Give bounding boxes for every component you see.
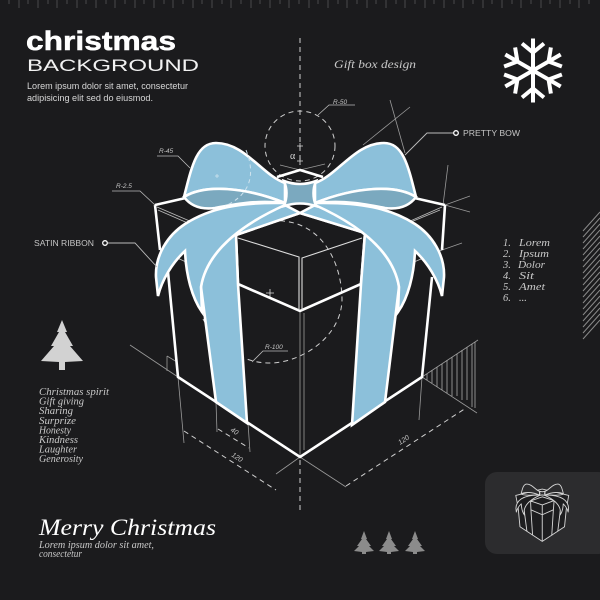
values list: Kindness	[38, 435, 78, 446]
dimension 40	[218, 427, 249, 448]
extra thin guide lines	[130, 165, 470, 487]
intro text: adipisicing elit sed do eiusmod.	[27, 93, 153, 104]
callout: satin ribbon: SATIN RIBBON	[34, 239, 94, 248]
bow loop left	[184, 143, 285, 203]
numbered list: 5.	[503, 282, 511, 293]
bow construction overlay	[225, 150, 251, 206]
numbered list: 3.	[502, 260, 511, 271]
bow loop right inside	[315, 189, 416, 208]
numbered list: Dolor	[517, 260, 546, 271]
label: alpha: α	[290, 151, 296, 162]
values list: Surprize	[39, 416, 77, 427]
values list: Christmas spirit	[39, 387, 109, 398]
numbered list: Lorem	[518, 238, 550, 249]
values list: Honesty	[38, 426, 72, 436]
inner lid lines	[157, 207, 442, 262]
ribbon front left band	[201, 204, 300, 423]
numbered list: Sit	[519, 271, 535, 282]
diagonal hatch at right edge	[583, 212, 600, 339]
values list: Sharing	[39, 406, 73, 417]
label: R-45	[157, 148, 190, 168]
label: R-50	[318, 99, 355, 115]
numbered list: 2.	[503, 249, 511, 260]
heading: background: BACKGROUND	[27, 57, 199, 75]
merry christmas greeting: Merry Christmas	[38, 515, 216, 540]
icon: snowflake	[500, 38, 566, 102]
ruler ticks along the top edge	[9, 0, 589, 8]
bow loop left inside	[184, 189, 285, 208]
hatched triangle	[422, 340, 478, 413]
label: R-50: R-50	[333, 99, 347, 106]
label: R-100	[252, 344, 288, 362]
numbered list: Amet	[518, 282, 546, 293]
dimension 40: 40	[229, 427, 239, 437]
intro text	[27, 81, 189, 104]
numbered list	[502, 238, 550, 304]
numbered list: Ipsum	[518, 249, 549, 260]
dimension 120 left	[184, 431, 276, 490]
values list	[38, 387, 109, 465]
label: R-2.5: R-2.5	[116, 183, 132, 190]
callout: pretty bow: PRETTY BOW	[463, 129, 520, 138]
numbered list: 6.	[503, 293, 511, 304]
intro text: Lorem ipsum dolor sit amet, consectetur	[27, 81, 189, 92]
numbered list: 1.	[503, 238, 511, 249]
icons: three small trees	[354, 531, 425, 554]
thumbnail panel	[485, 472, 600, 554]
ribbon front right band	[300, 204, 399, 425]
greeting subtext: Lorem ipsum dolor sit amet,	[38, 540, 154, 551]
lid top	[155, 170, 445, 250]
gift box illustration	[155, 143, 445, 457]
values list: Generosity	[39, 454, 84, 465]
greeting subtext: consectetur	[39, 549, 82, 560]
construction lines and dimensions	[112, 38, 478, 510]
construction circle R-100	[203, 221, 342, 363]
numbered list: ...	[519, 293, 527, 304]
values list: Gift giving	[39, 396, 84, 408]
ribbon tail right	[315, 203, 444, 312]
label: R-100: R-100	[265, 344, 283, 351]
bow loop right	[315, 143, 416, 203]
construction circle R-50	[265, 111, 335, 181]
values list: Laughter	[38, 444, 77, 456]
ribbon tail left	[156, 203, 285, 312]
heading: christmas: christmas	[26, 26, 176, 56]
callout: pretty bow	[405, 129, 520, 155]
dimension 120 right	[346, 408, 466, 486]
icon: small gift box outline	[516, 484, 569, 541]
title block	[26, 26, 199, 104]
label: R-45: R-45	[159, 148, 173, 155]
label: R-2.5	[112, 183, 155, 205]
caption: gift box design: Gift box design	[334, 57, 416, 71]
bow knot	[284, 181, 316, 206]
box body sides	[168, 272, 432, 457]
numbered list: 4.	[503, 271, 511, 282]
dimension 120 left: 120	[230, 452, 244, 464]
front lid	[236, 213, 365, 311]
icon: large tree	[41, 320, 83, 370]
dimension 120 right: 120	[397, 434, 411, 447]
greeting subtext	[38, 540, 154, 560]
callout: satin ribbon	[34, 239, 157, 267]
